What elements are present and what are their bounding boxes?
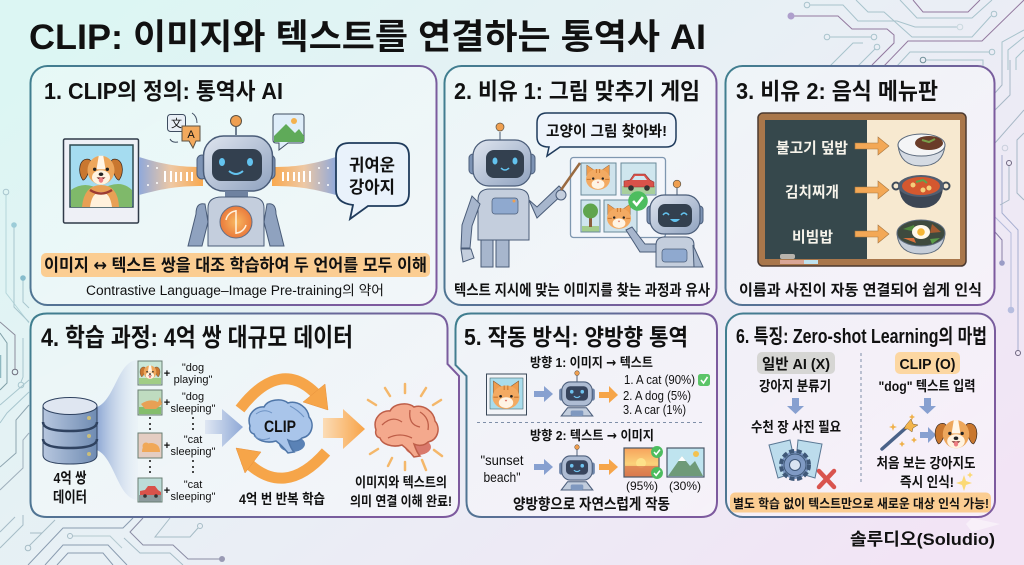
picture grid board — [570, 158, 666, 238]
pair: dog sleeping: sleeping" — [171, 403, 216, 415]
prompt text: "sunset — [480, 452, 524, 468]
column: ordinary AI — [751, 352, 841, 487]
arrows — [855, 137, 889, 243]
prompt text: beach" — [484, 469, 521, 485]
highlight: zero-shot summary — [730, 492, 991, 512]
icon: sunset image — [624, 446, 663, 479]
direction 2 heading: 방향 2: 텍스트 → 이미지 — [530, 428, 654, 444]
circuit decoration: top right — [793, 0, 1024, 70]
credit: 솔루디오(Soludio) — [850, 530, 995, 549]
cat card — [581, 163, 616, 195]
icon: dog photo — [64, 139, 138, 223]
menu text: 김치찌개 — [785, 184, 839, 201]
icon: magic wand — [882, 414, 918, 449]
recognition label — [876, 455, 976, 491]
arrow: data to CLIP — [205, 409, 243, 447]
scores: (30%) — [669, 479, 701, 493]
icon: sparkles — [956, 472, 973, 491]
pair: cat sleeping — [138, 433, 216, 458]
database label: 데이터 — [53, 489, 87, 506]
icon: translate: A — [187, 129, 195, 141]
icon: database — [43, 398, 97, 464]
scores — [626, 479, 701, 493]
photos needed label: 수천 장 사진 필요 — [751, 419, 841, 435]
ellipsis — [149, 460, 194, 473]
label: understood — [350, 475, 452, 509]
icon: image — [273, 114, 304, 150]
iteration arrows — [236, 379, 328, 478]
chip: CLIP: CLIP (O) — [900, 356, 956, 373]
pair: dog playing — [138, 361, 212, 386]
panel 2 heading: 2. 비유 1: 그림 맞추기 게임 — [454, 78, 700, 104]
panel 2 caption: 텍스트 지시에 맞는 이미지를 찾는 과정과 유사 — [454, 282, 710, 299]
icon: gear and photos — [769, 440, 834, 487]
results list: 3. A car (1%) — [623, 402, 686, 417]
icon: happy robot — [626, 180, 703, 267]
icon: CLIP brain: CLIP — [264, 417, 296, 436]
menu text: 비빔밥 — [792, 229, 833, 246]
menu text: 불고기 덮밥 — [776, 140, 848, 157]
speech bubble: find the cat: 고양이 그림 찾아봐! — [546, 123, 667, 140]
pair: dog sleeping: + — [164, 397, 170, 409]
label: understood: 의미 연결 이해 완료! — [350, 494, 452, 509]
menu text — [776, 140, 848, 246]
panel 4: training process — [30, 314, 459, 517]
circuit decoration: bottom left — [0, 515, 220, 565]
pair: car: "cat — [184, 479, 202, 491]
arrow: robot to image — [599, 459, 618, 475]
arrow down — [919, 398, 936, 414]
arrow: image to robot — [534, 386, 553, 402]
panel 5 caption: 양방향으로 자연스럽게 작동 — [513, 496, 670, 513]
tree card — [581, 200, 600, 232]
classifier label: 강아지 분류기 — [759, 378, 831, 394]
recognition label: 즉시 인식! — [900, 474, 954, 490]
results list: 2. A dog (5%) — [623, 388, 691, 403]
database label: 4억 쌍 — [54, 470, 87, 487]
selected cat card — [604, 200, 637, 232]
database label — [53, 470, 87, 506]
panel 3 heading: 3. 비유 2: 음식 메뉴판 — [736, 78, 938, 104]
title: CLIP: 이미지와 텍스트를 연결하는 통역사 AI — [29, 18, 706, 57]
pair: cat sleeping: + — [164, 440, 170, 452]
circuit decoration: left edge — [0, 189, 29, 490]
column: CLIP — [876, 352, 977, 491]
chip: ordinary AI: 일반 AI (X) — [762, 356, 830, 373]
panel 5 heading: 5. 작동 방식: 양방향 통역 — [464, 324, 688, 350]
panel 3 caption: 이름과 사진이 자동 연결되어 쉽게 인식 — [739, 282, 982, 299]
pair: dog sleeping: "dog — [182, 391, 204, 403]
arrow: to dog — [920, 427, 936, 443]
pair: cat sleeping: "cat — [184, 434, 202, 446]
circuit decoration: right edge — [995, 60, 1024, 356]
prompt text — [480, 452, 524, 485]
speech bubble: find the cat — [537, 113, 676, 156]
pointer stick — [561, 163, 580, 190]
pair: dog playing: + — [164, 368, 170, 380]
speech bubble: cute puppy — [336, 143, 409, 219]
arrow band: image to robot — [139, 157, 203, 195]
panel 4 heading: 4. 학습 과정: 4억 쌍 대규모 데이터 — [41, 324, 353, 352]
speech bubble: cute puppy: 강아지 — [349, 178, 395, 197]
speech bubble: cute puppy: 귀여운 — [349, 156, 395, 175]
pair: car — [138, 478, 216, 503]
data fan — [97, 360, 138, 500]
results list: 1. A cat (90%) — [624, 372, 695, 387]
car card — [621, 163, 656, 195]
results list — [623, 372, 710, 417]
arrow: robot to text — [599, 386, 618, 403]
icon: dog — [935, 420, 977, 448]
panel 1 heading: 1. CLIP의 정의: 통역사 AI — [44, 78, 283, 104]
icon: bibimbap bowl — [897, 220, 945, 254]
recognition label: 처음 보는 강아지도 — [876, 455, 976, 471]
menu board — [758, 113, 966, 266]
panel 2: picture matching game — [444, 66, 716, 305]
green check — [698, 374, 710, 386]
text input label: "dog" 텍스트 입력 — [878, 378, 976, 394]
training pairs — [138, 361, 216, 503]
scores: (95%) — [626, 479, 658, 493]
icon: bulgogi bowl — [898, 134, 945, 166]
panel 5: bidirectional translation — [456, 314, 717, 517]
pair: cat sleeping: sleeping" — [171, 446, 216, 458]
subtitle: acronym: Contrastive Language–Image Pre-training의 약어 — [86, 283, 384, 298]
icon: translate: 文 — [171, 116, 182, 130]
pair: dog playing: playing" — [174, 374, 212, 386]
icon: teacher robot — [461, 123, 566, 267]
arrow: CLIP to understood — [323, 409, 365, 449]
highlight: contrastive learning: 이미지 ↔ 텍스트 쌍을 대조 학습하여 두 언어를 모두 이해 — [44, 256, 427, 276]
pair: dog playing: "dog — [182, 362, 204, 374]
panel 1: CLIP definition — [30, 66, 436, 305]
icon: robot — [559, 445, 595, 490]
arrow down — [787, 398, 804, 414]
icon: central robot — [188, 116, 284, 246]
pair: car: sleeping" — [171, 491, 216, 503]
pair: car: + — [164, 485, 170, 497]
icon: glowing brain — [368, 384, 442, 470]
icon: cat photo — [486, 374, 526, 415]
icon: robot — [559, 371, 595, 416]
panel 6: zero-shot learning — [726, 314, 995, 517]
arrow band: robot to text — [272, 157, 336, 195]
panel 3: food menu — [726, 66, 994, 305]
sparkle — [966, 518, 1000, 532]
icon: kimchi stew pot — [892, 175, 950, 208]
highlight: zero-shot summary: 별도 학습 없이 텍스트만으로 새로운 대상 인식 가능! — [733, 496, 989, 511]
arrow: text to robot — [534, 459, 553, 475]
icon: mountain image — [667, 448, 704, 477]
icon: CLIP brain — [249, 400, 312, 453]
label: understood: 이미지와 텍스트의 — [355, 475, 447, 490]
check badge — [628, 191, 648, 211]
icon: translate — [168, 113, 200, 148]
ellipsis — [149, 417, 194, 430]
direction 1 heading: 방향 1: 이미지 → 텍스트 — [530, 355, 653, 371]
pair: dog sleeping — [138, 390, 216, 415]
label: iterations: 4억 번 반복 학습 — [239, 491, 325, 507]
